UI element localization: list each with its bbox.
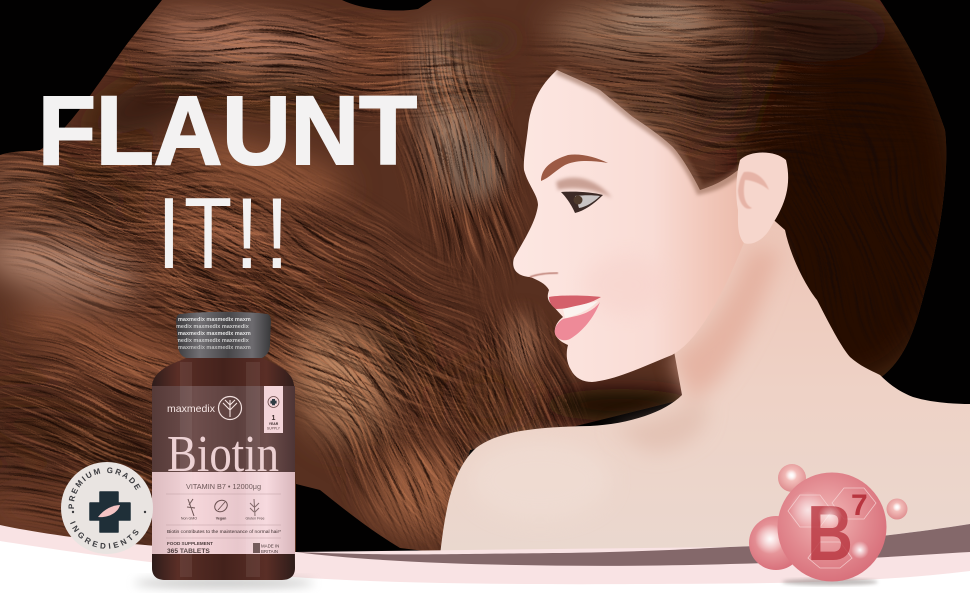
badge top text <box>74 473 140 514</box>
bottle cap: maxmedix maxmedix maxm <box>178 331 251 337</box>
made in Britain <box>253 543 279 554</box>
photo: lower lip <box>555 302 600 340</box>
photo: neck shadow <box>610 250 780 452</box>
bottom swoosh: pale pink band <box>0 524 970 584</box>
label rule <box>166 494 281 538</box>
glass highlights <box>180 362 192 577</box>
vitamin dose: VITAMIN B7 • 12000μg <box>186 482 261 491</box>
icon: vegan <box>213 498 229 520</box>
bottom swoosh: white base <box>0 524 970 600</box>
bottle cap: medix maxmedix maxmedix <box>176 338 250 344</box>
bottle cap: medix maxmedix maxmedix <box>176 324 250 330</box>
supply tab <box>264 386 283 433</box>
title: FLAUNT: FLAUNT <box>38 76 417 185</box>
supply tab: 1 <box>272 415 276 422</box>
tablet count: 365 TABLETS <box>167 548 210 555</box>
icon: non GMO <box>181 499 197 520</box>
title: IT!!: T <box>184 178 232 290</box>
supply tab: YEAR <box>269 422 279 426</box>
icon: gluten free <box>246 499 264 520</box>
title: IT!!: ! <box>265 176 289 290</box>
title: IT!! <box>157 176 289 290</box>
icon: non GMO: Non GMO <box>181 516 197 520</box>
icon: gluten free: Gluten Free <box>246 516 264 520</box>
photo: hairline softening <box>557 70 745 190</box>
badge: premium grade ingredients: PREMIUM GRADE <box>68 468 141 509</box>
brand emblem <box>218 396 242 420</box>
product bottle: Biotin <box>152 312 295 580</box>
right bubble <box>886 498 908 520</box>
badge dots <box>72 511 146 513</box>
bottom swoosh: mauve band <box>296 524 970 566</box>
bubble hexagons <box>788 488 876 568</box>
food supplement: FOOD SUPPLEMENT <box>167 541 213 546</box>
title: IT!!: I <box>157 176 181 290</box>
upper label <box>152 386 295 472</box>
made in Britain: BRITAIN <box>261 549 278 554</box>
made in Britain: MADE IN <box>261 544 279 548</box>
photo: upper lip <box>549 296 601 309</box>
vitamin B7 bubble cluster <box>749 464 908 586</box>
photo: nostril <box>530 273 558 277</box>
bottle cap: maxmedix maxmedix maxm <box>178 317 251 323</box>
superscript 7: 7 <box>851 489 868 522</box>
photo: eyebrow <box>541 154 608 181</box>
icon: vegan: Vegan <box>216 516 226 520</box>
photo: eye shadow <box>556 178 612 198</box>
bottle body <box>152 358 295 580</box>
badge bottom text: INGREDIENTS <box>70 521 138 549</box>
photo: eye <box>561 192 603 213</box>
bottle cap: maxmedix maxmedix maxm <box>178 345 251 351</box>
top bubble <box>778 464 806 492</box>
main bubble <box>778 472 886 582</box>
icon: medical cross with feather <box>90 492 130 532</box>
left bubble <box>749 516 803 570</box>
title: IT!!: ! <box>235 176 259 290</box>
supply tab: SUPPLY <box>267 426 281 430</box>
letter B: B <box>807 489 853 577</box>
lower label <box>152 472 295 554</box>
photo: face in profile <box>513 70 745 382</box>
photo: right shoulder highlight <box>470 440 610 520</box>
photo: cheek blush <box>583 255 667 315</box>
product name: Biotin <box>167 426 279 483</box>
photo: ear <box>736 152 788 244</box>
photo: teeth <box>563 301 598 318</box>
claim line: Biotin contributes to the maintenance of normal hair* <box>167 529 281 535</box>
badge: premium grade ingredients <box>61 462 153 554</box>
bottle ground shadow <box>134 578 314 588</box>
photo: woman's body, neck and shoulders <box>440 190 970 560</box>
bottle cap <box>176 312 271 358</box>
bubble shadow <box>782 578 878 586</box>
brand name: maxmedix <box>167 403 216 415</box>
